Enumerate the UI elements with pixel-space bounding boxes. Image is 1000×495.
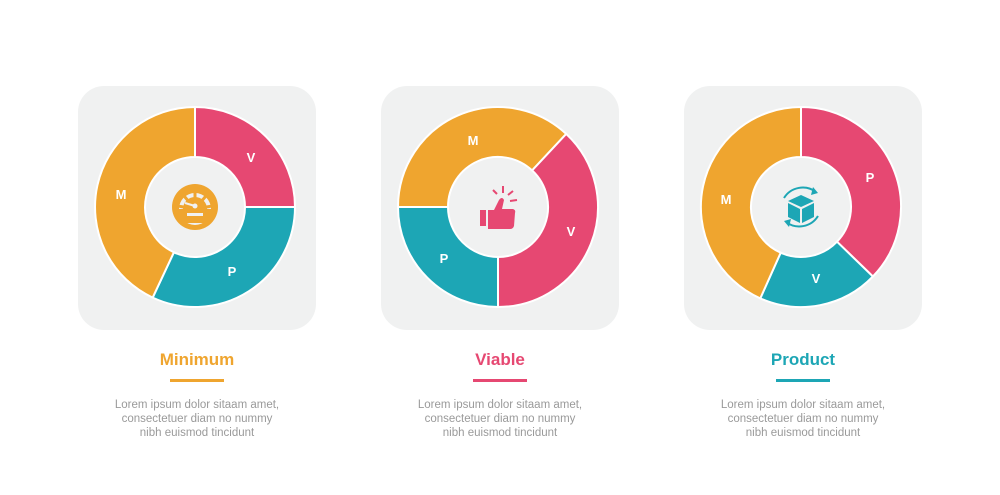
text block: minimum: consectetuer diam no nummy (122, 413, 273, 425)
segment labels: M (721, 192, 731, 207)
segment labels: P (228, 264, 237, 279)
icon: speedometer (172, 184, 224, 230)
segment labels: P (440, 251, 449, 266)
text block: minimum: Lorem ipsum dolor sitaam amet, (115, 399, 279, 411)
text block: product: consectetuer diam no nummy (728, 413, 879, 425)
segment labels: V (812, 271, 821, 286)
text block: minimum (115, 350, 279, 439)
text block: viable: consectetuer diam no nummy (425, 413, 576, 425)
panel: viable (381, 86, 619, 330)
donut chart: minimum (95, 107, 295, 307)
segment labels (116, 150, 256, 279)
donut chart: product (701, 107, 901, 307)
text block: product: Lorem ipsum dolor sitaam amet, (721, 399, 885, 411)
segment labels: V (567, 224, 576, 239)
text block: viable: Lorem ipsum dolor sitaam amet, (418, 399, 582, 411)
segment labels: P (866, 170, 875, 185)
icon: thumbs up (480, 186, 517, 229)
text block: viable: nibh euismod tincidunt (443, 427, 558, 439)
text block: product: nibh euismod tincidunt (746, 427, 861, 439)
text block: minimum: Minimum (160, 350, 234, 369)
segment labels: M (468, 133, 478, 148)
text block: product (721, 350, 885, 439)
segment labels: V (247, 150, 256, 165)
segment labels (721, 170, 875, 286)
text block: product: Product (771, 350, 835, 369)
panel: product (684, 86, 922, 330)
panel: minimum (78, 86, 316, 330)
text block: minimum: nibh euismod tincidunt (140, 427, 255, 439)
segment labels: M (116, 187, 126, 202)
donut chart: viable (398, 107, 598, 307)
segment labels (440, 133, 576, 266)
icon: box cycle (784, 187, 818, 227)
text block: viable (418, 350, 582, 439)
text block: viable: Viable (475, 350, 525, 369)
